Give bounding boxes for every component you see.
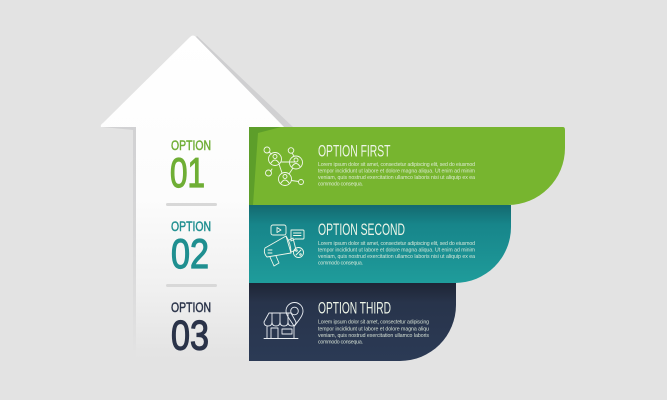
divider — [166, 284, 217, 287]
option 03 label: 03 — [171, 312, 209, 358]
option 02 label: OPTION — [171, 219, 211, 234]
text block: option first — [318, 162, 475, 188]
option 03 label: OPTION — [171, 300, 211, 315]
panel: option second — [249, 205, 511, 283]
text block: option third: veniam, quis nostrud exercitation ullamco laboris — [318, 333, 429, 339]
white upward arrow — [101, 36, 284, 361]
text block: option first: veniam, quis nostrud exercitation ullamco laboris nisi ut aliquip ex ea — [318, 175, 475, 181]
icon: connected people network — [264, 147, 304, 186]
text block: option second: tempor incididunt ut labore et dolore magna aliqua. Ut enim ad minim — [318, 248, 475, 254]
text block: option second — [318, 241, 475, 266]
text block: option first: tempor incididunt ut labore et dolore magna aliqua. Ut enim ad minim — [318, 168, 475, 174]
text block: option second: veniam, quis nostrud exercitation ullamco laboris nisi ut aliquip ex ea — [318, 254, 475, 260]
text block: option third: Lorem ipsum dolor sit amet, consectetur adipiscing — [318, 320, 429, 326]
text block: option third — [318, 320, 429, 346]
heading: option first: OPTION FIRST — [318, 142, 390, 160]
text block: option second: Lorem ipsum dolor sit amet, consectetur adipiscing elit, sed do eiusmod — [318, 241, 475, 247]
panel: option first — [249, 127, 565, 205]
option 01 label: 01 — [170, 149, 205, 196]
divider — [166, 203, 217, 206]
heading: option third: OPTION THIRD — [318, 300, 391, 318]
text block: option first: commodo consequa. — [318, 182, 363, 188]
darker fold on green panel — [249, 127, 281, 205]
icon: shop with location pin — [264, 302, 303, 338]
heading: option second: OPTION SECOND — [318, 221, 405, 239]
text block: option first: Lorem ipsum dolor sit amet, consectetur adipiscing elit, sed do eiusmod — [318, 162, 475, 168]
option 01 label: OPTION — [171, 138, 211, 153]
text block: option third: commodo consequa. — [318, 340, 363, 346]
text block: option second: commodo consequa. — [318, 260, 363, 266]
text block: option third: tempor incididunt ut labore et dolore magna aliqu — [318, 326, 429, 332]
icon: megaphone with video, chat and percent — [264, 225, 304, 266]
arrow shadow — [102, 36, 293, 361]
panel: option third — [249, 283, 456, 361]
option 02 label: 02 — [171, 230, 209, 277]
